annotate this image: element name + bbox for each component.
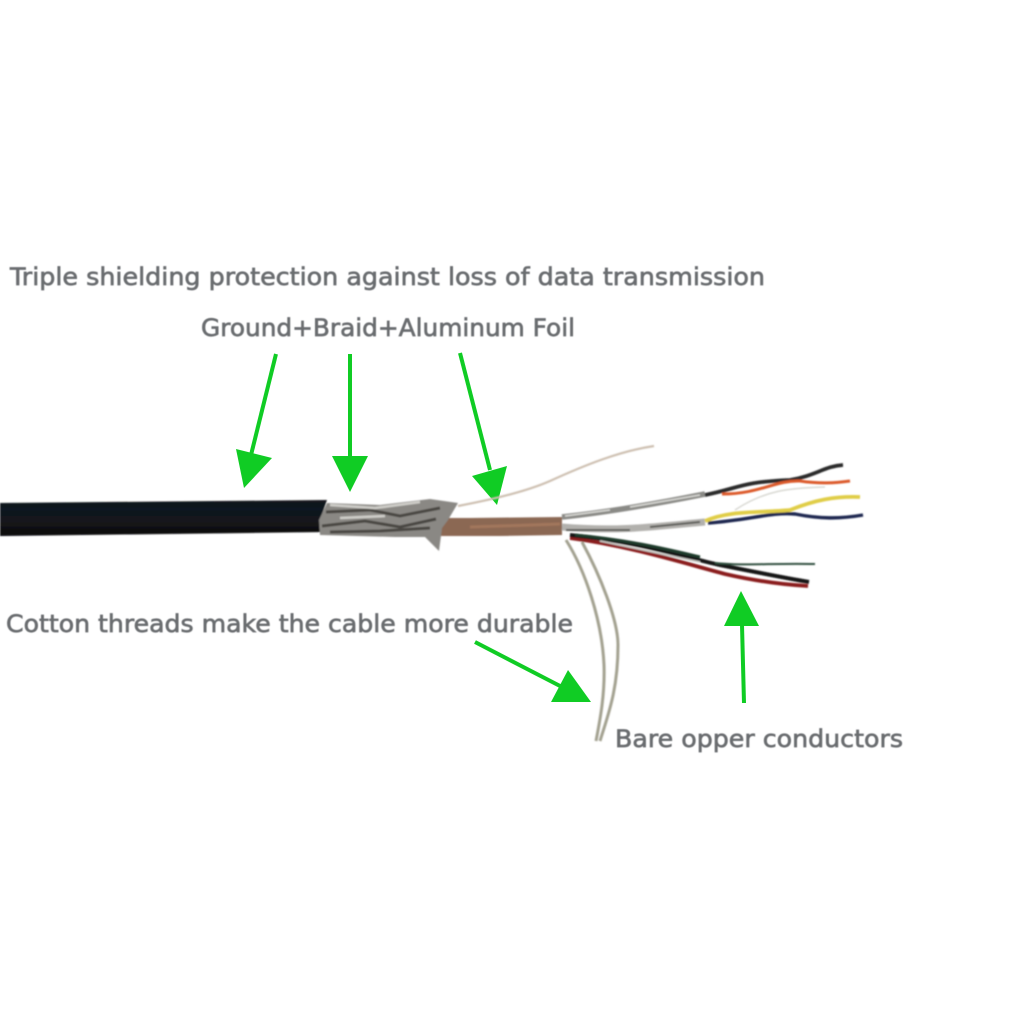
subtitle: shield layers: Ground+Braid+Aluminum Foil bbox=[201, 314, 575, 342]
braid shield bbox=[319, 499, 458, 551]
lower foil pair bbox=[562, 522, 705, 529]
green white red black conductors bbox=[570, 538, 808, 586]
black and red wires bbox=[705, 465, 843, 495]
arrow: cotton threads bbox=[475, 642, 591, 702]
arrow: bare conductors bbox=[724, 591, 759, 703]
label: cotton threads: Cotton threads make the cable more durable bbox=[6, 610, 573, 638]
copper foil section bbox=[440, 517, 562, 536]
white wire bbox=[735, 487, 825, 510]
cotton threads bbox=[566, 540, 618, 741]
navy and yellow wires bbox=[708, 514, 863, 523]
label: bare copper conductors: Bare opper conductors bbox=[615, 725, 903, 753]
arrow: aluminum foil bbox=[460, 353, 507, 505]
upper foil pair bbox=[562, 494, 705, 517]
drain wire bbox=[458, 446, 654, 506]
cable illustration bbox=[0, 446, 863, 741]
arrow: ground bbox=[236, 354, 276, 488]
arrow: braid bbox=[332, 354, 368, 492]
black jacket bbox=[0, 500, 327, 536]
title: triple shielding: Triple shielding protection against loss of data transmission bbox=[9, 263, 765, 291]
